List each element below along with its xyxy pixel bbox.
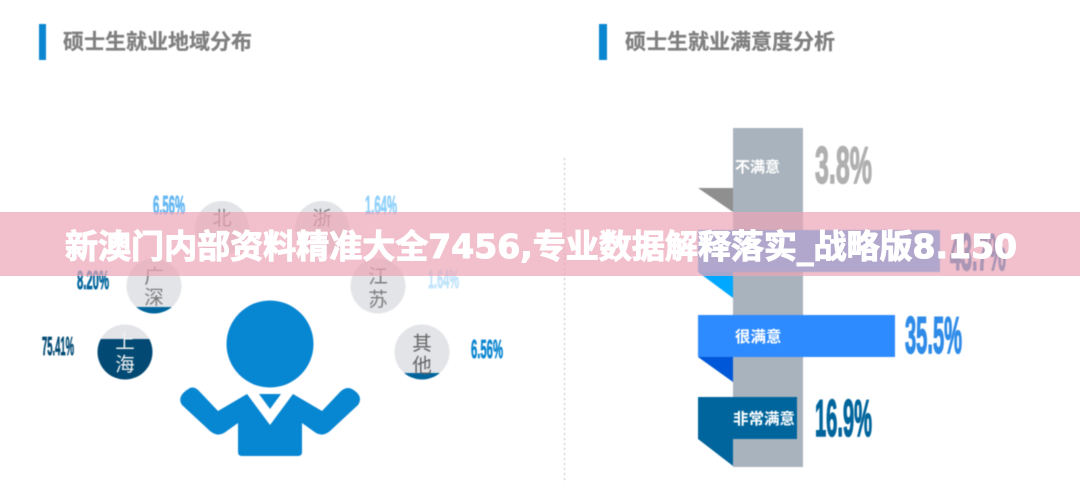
region: Zhejiang: 浙	[312, 208, 332, 230]
region: Guangzhou and Shenzhen	[77, 258, 190, 315]
heading: regional distribution	[39, 24, 252, 60]
region: Beijing	[153, 190, 249, 255]
panel: satisfaction chart: 35.5%	[905, 307, 962, 365]
banner title: 新澳门内部资料精准大全7456,专业数据解释落实_战略版8.150	[65, 227, 1017, 266]
region: Shanghai: 上	[115, 331, 135, 353]
region: Beijing: 6.56%	[153, 190, 185, 220]
region: Shanghai: 75.41%	[42, 331, 74, 361]
panel: regional distribution chart	[42, 190, 503, 456]
region: Shanghai: 海	[115, 354, 135, 376]
row: very satisfied	[698, 307, 962, 382]
region: Guangzhou and Shenzhen: 深	[144, 287, 164, 309]
panel: regional distribution chart: 1.64%	[428, 264, 459, 294]
panel: satisfaction chart: 3.8%	[815, 137, 872, 195]
infographic artwork: 6.56%	[471, 334, 503, 364]
column	[733, 128, 803, 467]
panel: satisfaction chart	[698, 128, 1006, 467]
icon: person shrugging	[180, 300, 360, 456]
region: Jiangsu	[350, 258, 459, 314]
region: Beijing: 北	[212, 208, 232, 230]
row: very satisfied: 很满意	[735, 327, 782, 346]
region: Guangzhou and Shenzhen: 广	[144, 266, 164, 288]
heading: regional distribution: 硕士生就业地域分布	[63, 31, 252, 54]
panel: regional distribution chart: 1.64%	[365, 190, 397, 220]
row: dissatisfied: 不满意	[735, 158, 780, 176]
row: dissatisfied	[698, 137, 872, 212]
row: satisfied	[698, 224, 1006, 298]
heading: satisfaction analysis	[599, 24, 835, 60]
region: Zhejiang	[295, 190, 397, 255]
region: other: 他	[412, 355, 432, 377]
row: extremely satisfied: 非常满意	[733, 409, 795, 428]
row: extremely satisfied	[698, 390, 872, 466]
region: other	[390, 324, 503, 381]
region: Jiangsu: 江	[368, 266, 388, 288]
heading: satisfaction analysis: 硕士生就业满意度分析	[625, 30, 835, 54]
region: Jiangsu: 苏	[368, 289, 388, 311]
region: Guangzhou and Shenzhen: 8.20%	[77, 265, 109, 295]
region: other: 其	[412, 333, 432, 355]
panel: satisfaction chart: 16.9%	[815, 390, 872, 448]
region: Shanghai	[42, 324, 155, 384]
